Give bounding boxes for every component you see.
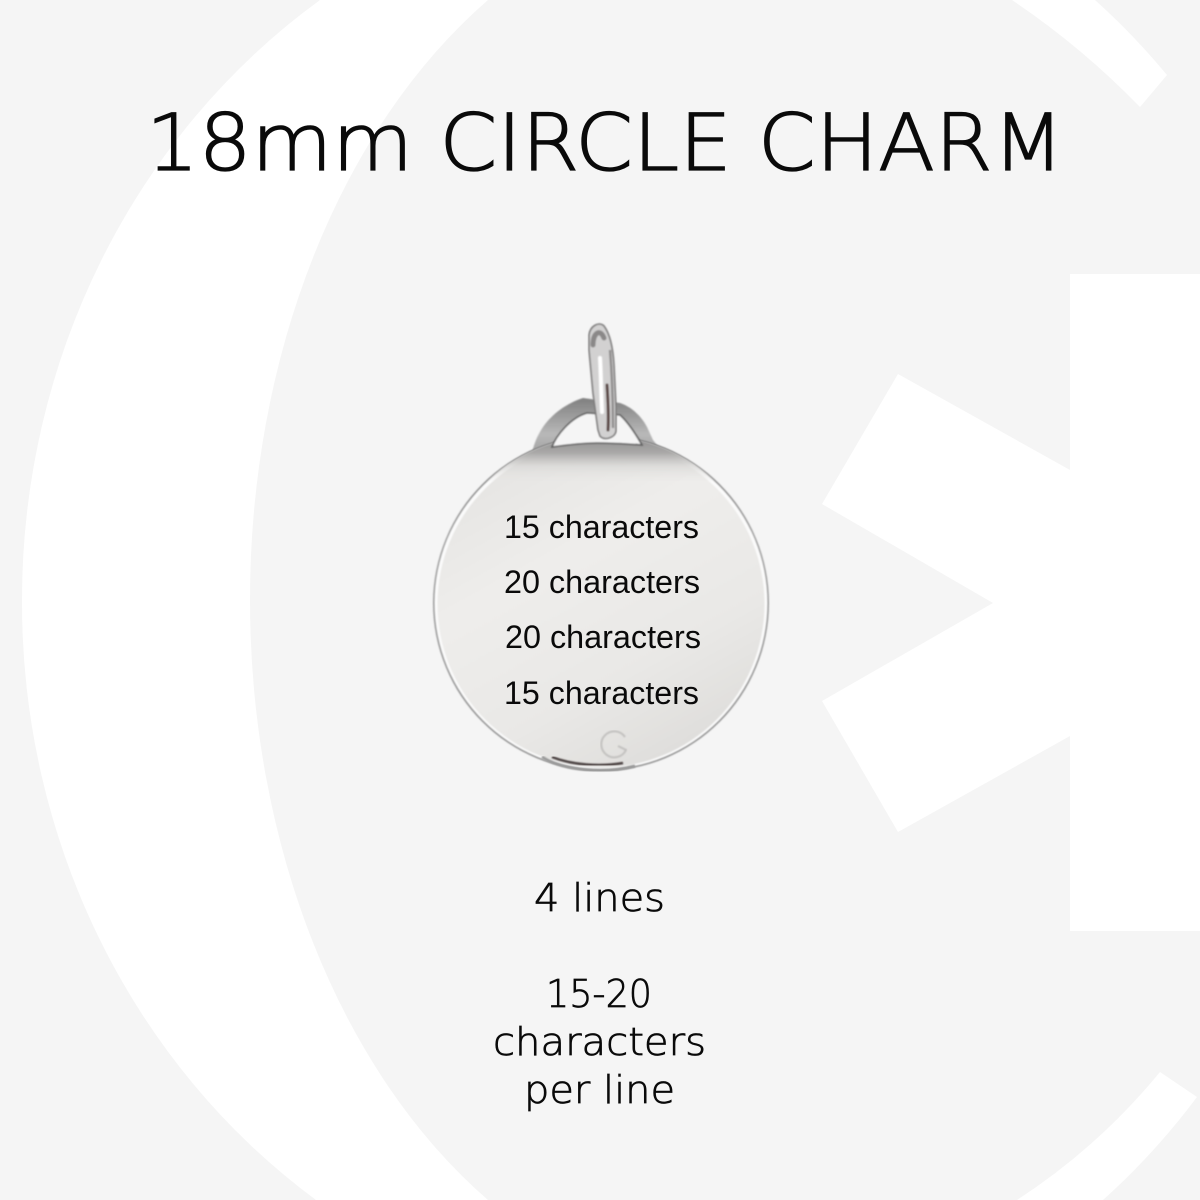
charm bottom edge reflection	[552, 757, 623, 765]
caption range: 15-20	[546, 972, 652, 1016]
charm top shading	[434, 436, 768, 770]
engraving line 4: 15 characters	[504, 675, 699, 711]
charm disc face	[438, 440, 764, 768]
caption characters: characters	[493, 1020, 706, 1064]
engraving line 1: 15 characters	[504, 509, 699, 545]
engraving line 2: 20 characters	[504, 564, 700, 600]
charm bail	[527, 398, 664, 470]
charm rim highlight	[434, 436, 768, 770]
charm bail hole	[552, 413, 642, 447]
charm bottom edge shadow	[542, 757, 635, 770]
caption line count: 4 lines	[534, 876, 665, 920]
ring dark streak	[607, 385, 608, 430]
ring body	[589, 324, 616, 438]
caption: spec text	[493, 876, 706, 1112]
title: 18mm CIRCLE CHARM	[146, 99, 1064, 189]
ring top shadow	[593, 333, 604, 345]
charm disc rim	[433, 435, 769, 771]
engraving line 3: 20 characters	[505, 619, 701, 655]
caption per line: per line	[524, 1068, 675, 1112]
ring highlight	[600, 358, 602, 412]
charm jump ring	[589, 324, 616, 438]
charm maker mark	[601, 731, 626, 757]
ring side shade	[610, 350, 613, 428]
charm pendant	[433, 324, 769, 771]
watermark: logo arrow	[822, 274, 1200, 931]
